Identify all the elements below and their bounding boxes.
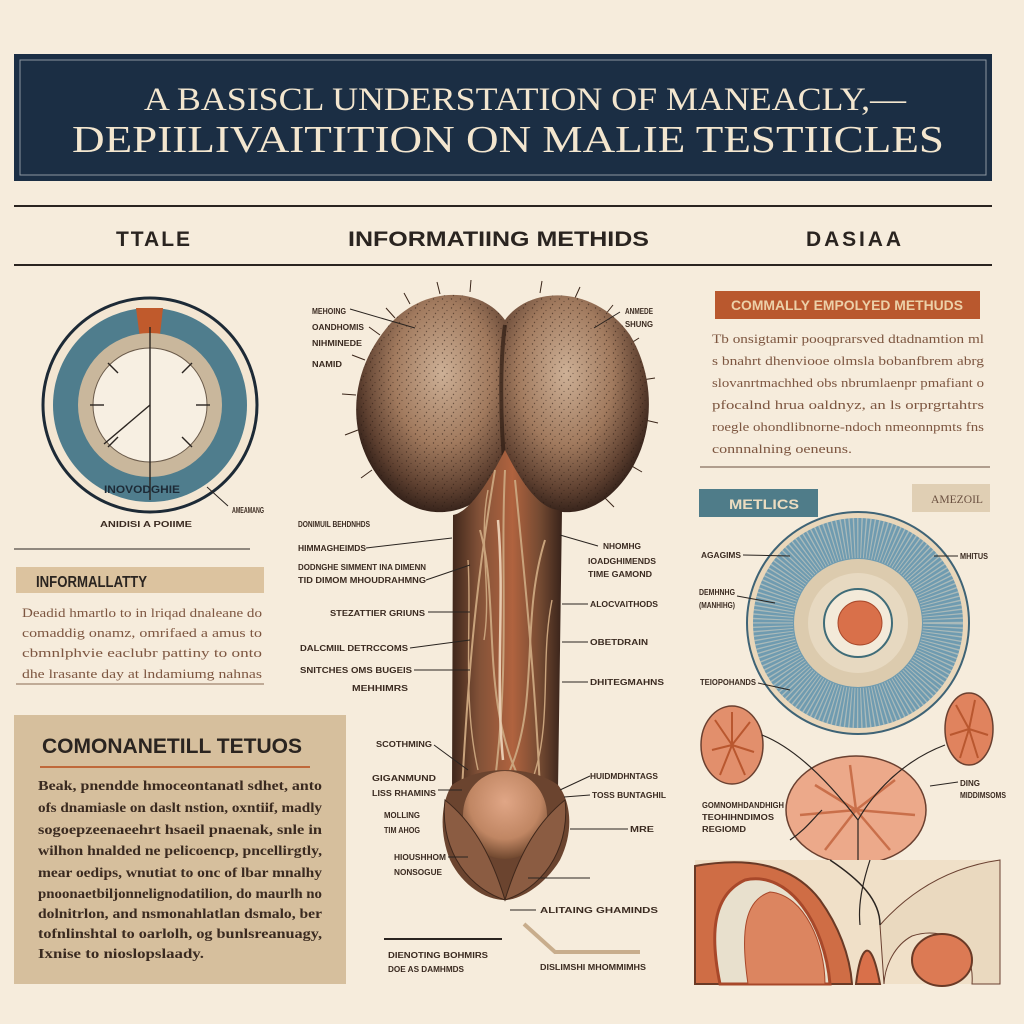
panel text: tofnlinshtal to oarlolh, og bunlsreanuagy, bbox=[38, 926, 322, 941]
left labels: TID DIMOM MHOUDRAHMNG bbox=[298, 576, 426, 585]
text block: methods: roegle ohondlibnorne-ndoch nmeonnpmts fns bbox=[712, 420, 984, 434]
bottom caption: DIENOTING BOHMIRS bbox=[388, 951, 489, 960]
cross-section diagram: TEIOPOHANDS bbox=[700, 678, 757, 687]
column heading: right: DASIAA bbox=[806, 228, 901, 251]
title banner: DEPIILIVAITITION ON MALIE TESTIICLES bbox=[72, 119, 944, 161]
left labels: MOLLING bbox=[384, 811, 420, 820]
left labels: DONIMUIL BEHDNHDS bbox=[298, 520, 371, 529]
title banner: A BASISCL UNDERSTATION OF MANEACLY,— bbox=[144, 82, 907, 118]
panel: commonly methods box bbox=[14, 715, 346, 984]
column heading: centre: INFORMATIING METHIDS bbox=[348, 228, 649, 251]
right labels: DHITEGMAHNS bbox=[590, 678, 665, 687]
tissue illustrations: TEOHIHNDIMOS bbox=[702, 813, 775, 822]
text block: informality bbox=[22, 606, 262, 681]
text block: informality: Deadid hmartlo to in lriqad dnaleane do bbox=[22, 606, 262, 620]
right labels: ALOCVAITHODS bbox=[590, 600, 659, 609]
panel text: pnoonaetbiljonnelignodatilion, do maurlh no bbox=[38, 886, 322, 901]
left labels: DODNGHE SIMMENT INA DIMENN bbox=[298, 563, 426, 572]
left labels: HIMMAGHEIMDS bbox=[298, 544, 367, 553]
text block: methods: s bnahrt dhenviooe olmsla bobanfbrem abrg bbox=[712, 354, 985, 368]
metrics band: METLICS bbox=[729, 496, 799, 512]
tissue illustrations: DING bbox=[960, 779, 980, 788]
left labels: HIOUSHHOM bbox=[394, 853, 446, 862]
panel: commonly employed methods bbox=[715, 291, 980, 319]
right labels: TIME GAMOND bbox=[588, 570, 652, 579]
left labels: DALCMIIL DETRCCOMS bbox=[300, 644, 409, 653]
bottom caption: DOE AS DAMHMDS bbox=[388, 965, 465, 974]
left labels: GIGANMUND bbox=[372, 774, 436, 783]
panel text: Ixnise to nioslopslaady. bbox=[38, 946, 204, 961]
left labels: NAMID bbox=[312, 360, 342, 369]
text block: methods: pfocalnd hrua oaldnyz, an ls orprgrtahtrs bbox=[712, 398, 984, 412]
text block: informality: cbmnlphvie eaclubr pattiny to onto bbox=[22, 646, 262, 660]
tan tag bbox=[912, 484, 990, 512]
left labels bbox=[298, 307, 470, 877]
right labels: IOADGHIMENDS bbox=[588, 557, 657, 566]
text block: methods: connnalning oeneuns. bbox=[712, 442, 852, 456]
right labels bbox=[510, 307, 666, 915]
panel heading: COMONANETILL TETUOS bbox=[42, 735, 302, 758]
lobes bbox=[342, 280, 658, 512]
cross-section diagram: AGAGIMS bbox=[701, 551, 742, 560]
text block: methods: slovanrtmachhed obs nbrumlaenpr pmafiant o bbox=[712, 376, 984, 390]
tissue illustrations: REGIOMD bbox=[702, 825, 746, 834]
tip bbox=[443, 770, 569, 900]
gauge chart bbox=[43, 298, 264, 529]
left labels: NONSOGUE bbox=[394, 868, 443, 877]
bottom caption: DISLIMSHI MHOMMIMHS bbox=[540, 963, 647, 972]
text block: methods: Tb onsigtamir pooqprarsved dtadnamtion ml bbox=[712, 332, 985, 346]
panel text: dolnitrlon, and nsmonahlatlan dsmalo, ber bbox=[38, 906, 322, 921]
tan tag: AMEZOIL bbox=[931, 492, 983, 506]
shaft bbox=[452, 450, 562, 790]
left labels: TIM AHOG bbox=[384, 826, 420, 835]
panel: informality band: INFORMALLATTY bbox=[36, 574, 148, 591]
panel text: mear oedips, wnutiat to onc of lbar mnalhy bbox=[38, 865, 322, 880]
right labels: ALITAING GHAMINDS bbox=[540, 906, 659, 915]
left labels: MEHOING bbox=[312, 307, 346, 316]
right labels: TOSS BUNTAGHIL bbox=[592, 791, 666, 800]
left labels: SNITCHES OMS BUGEIS bbox=[300, 666, 413, 675]
text block: methods bbox=[712, 332, 985, 456]
title banner bbox=[14, 54, 992, 181]
right labels: HUIDMDHNTAGS bbox=[590, 772, 659, 781]
right labels: MRE bbox=[630, 825, 655, 834]
bottom section illustration bbox=[695, 860, 1000, 986]
cross-section diagram: (MANHIHG) bbox=[699, 601, 735, 610]
right labels: SHUNG bbox=[625, 320, 653, 329]
tissue illustrations: GOMNOMHDANDHIGH bbox=[702, 801, 784, 810]
left labels: OANDHOMIS bbox=[312, 323, 365, 332]
panel text: wilhon hnalded ne pelicoencp, pncellirgtly, bbox=[38, 843, 322, 858]
column heading: left: TTALE bbox=[116, 228, 190, 251]
left labels: LISS RHAMINS bbox=[372, 789, 437, 798]
gauge chart: INOVODGHIE bbox=[104, 484, 180, 496]
panel: informality band bbox=[16, 567, 264, 593]
tissue illustrations: MIDDIMSOMS bbox=[960, 791, 1007, 800]
right labels: ANMEDE bbox=[625, 307, 654, 316]
cross-section diagram: MHITUS bbox=[960, 552, 989, 561]
panel: commonly employed methods: COMMALLY EMPOLYED METHUDS bbox=[731, 298, 963, 313]
right labels: NHOMHG bbox=[603, 542, 641, 551]
right labels: OBETDRAIN bbox=[590, 638, 648, 647]
cross-section diagram bbox=[699, 512, 989, 734]
tissue illustrations bbox=[701, 693, 1007, 864]
panel text bbox=[38, 778, 323, 961]
text block: informality: dhe lrasante day at lndamiumg nahnas bbox=[22, 667, 262, 681]
left labels: SCOTHMING bbox=[376, 740, 432, 749]
gauge chart: AMEAMANG bbox=[232, 506, 264, 515]
cross-section diagram: DEMHNHG bbox=[699, 588, 735, 597]
left labels: NIHMINEDE bbox=[312, 339, 363, 348]
text block: informality: comaddig onamz, omrifaed a amus to bbox=[22, 626, 262, 640]
panel text: ofs dnamiasle on daslt nstion, oxntiif, madly bbox=[38, 800, 322, 815]
panel text: Beak, pnendde hmoceontanatl sdhet, anto bbox=[38, 778, 322, 793]
central anatomical diagram bbox=[298, 280, 666, 974]
left labels: STEZATTIER GRIUNS bbox=[330, 609, 426, 618]
bottom caption bbox=[384, 924, 647, 974]
left labels: MEHHIMRS bbox=[352, 684, 409, 693]
panel text: sogoepzeenaeehrt hsaeil pnaenak, snle in bbox=[38, 822, 323, 837]
metrics band bbox=[699, 489, 818, 517]
gauge chart: ANIDISI A POIIME bbox=[100, 520, 193, 529]
